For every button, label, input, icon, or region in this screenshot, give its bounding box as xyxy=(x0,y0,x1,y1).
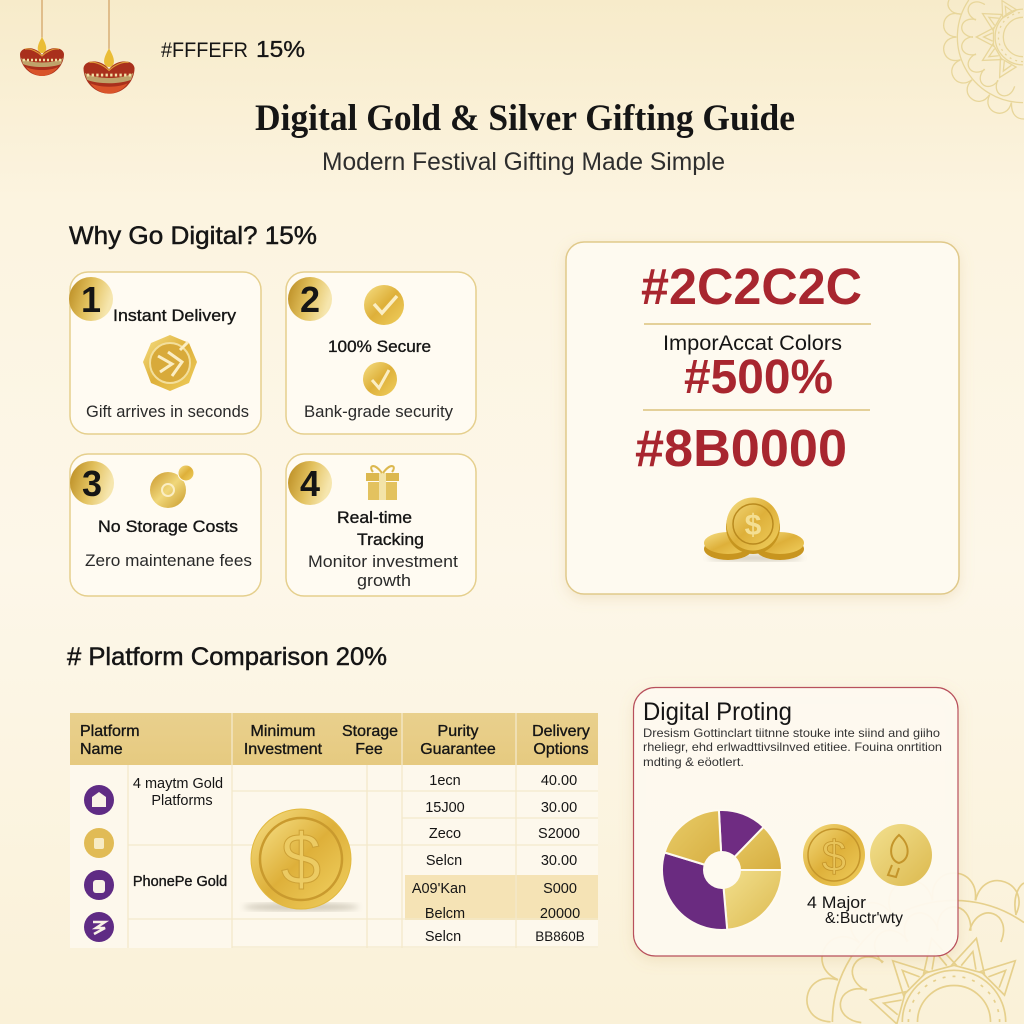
badge 2 xyxy=(288,277,332,321)
icon: coin stack xyxy=(704,498,804,561)
platform icons xyxy=(84,785,114,942)
card 1 text: Gift arrives in seconds xyxy=(86,402,249,421)
table header: Purity xyxy=(438,723,478,740)
card 2 heading: 100% Secure xyxy=(328,338,431,356)
top label: 15% xyxy=(256,36,305,62)
badge 1 xyxy=(69,277,113,321)
subtitle: Modern Festival Gifting Made Simple xyxy=(322,148,725,176)
panel paragraph: mdting & eöotlert. xyxy=(643,755,744,769)
icon: dollar coin: $ xyxy=(822,832,846,881)
panel paragraph: rheliegr, ehd erlwadttivsilnved etitiee. Fouina onrtition xyxy=(643,740,942,754)
mandala ornament: bottom right xyxy=(804,873,1024,1024)
icon: gold seal xyxy=(143,335,197,391)
chart caption xyxy=(807,893,903,927)
icon: gold disc xyxy=(150,465,194,508)
card 4 text: Monitor investment xyxy=(308,552,458,571)
table header: Platform xyxy=(80,723,140,740)
icon: drop coin xyxy=(870,824,932,886)
top label xyxy=(161,36,305,62)
panel heading: Digital Proting xyxy=(643,698,792,726)
badge 4 xyxy=(288,461,332,505)
panel: digital proting xyxy=(634,688,958,956)
table header: Minimum xyxy=(251,723,315,740)
table values xyxy=(412,773,585,945)
icon: dollar coin xyxy=(803,824,865,886)
value: 2C2C2C: #2C2C2C xyxy=(641,258,862,315)
panel: important colors xyxy=(566,242,959,594)
icon: large gold coin xyxy=(243,809,359,911)
platform names: Platforms xyxy=(151,793,213,809)
badge 3: 3 xyxy=(82,463,102,504)
table header: Fee xyxy=(355,741,383,758)
table values: 1ecn xyxy=(429,773,461,789)
card 2 text: Bank-grade security xyxy=(304,402,453,421)
platform names: 4 maytm Gold xyxy=(133,776,223,792)
mandala ornament: top right xyxy=(942,0,1024,119)
donut chart xyxy=(662,810,782,930)
platform names xyxy=(133,776,227,890)
table header: Investment xyxy=(244,741,323,758)
table values: 15J00 xyxy=(425,800,465,816)
icon: small gold check xyxy=(363,362,397,396)
badge 3 xyxy=(70,461,114,505)
panel paragraph xyxy=(643,726,942,769)
icon: hanging diya lamps xyxy=(20,0,135,94)
table values: A09'Kan xyxy=(412,881,466,897)
card 4: real-time tracking xyxy=(286,454,476,596)
table header: Guarantee xyxy=(420,741,496,758)
heading: platform comparison: # Platform Comparison 20% xyxy=(67,643,387,671)
table header: Storage xyxy=(342,723,398,740)
table values: Selcn xyxy=(426,853,462,869)
table header xyxy=(70,713,598,765)
icon: gold check xyxy=(364,285,404,325)
value: 8B0000: #8B0000 xyxy=(635,420,847,478)
table values: Selcn xyxy=(425,929,461,945)
card 3: no storage costs xyxy=(70,454,261,596)
table values: Belcm xyxy=(425,906,465,922)
card 3 text: Zero maintenane fees xyxy=(85,551,252,570)
card 4 heading: Tracking xyxy=(357,531,424,549)
card 3 heading: No Storage Costs xyxy=(98,518,238,536)
table header: Delivery xyxy=(532,723,590,740)
icon: gift box xyxy=(366,466,399,500)
value: 500 percent: #500% xyxy=(684,351,833,404)
card 2: secure xyxy=(286,272,476,434)
table values: 30.00 xyxy=(541,853,577,869)
table values: 40.00 xyxy=(541,773,577,789)
table values: BB860B xyxy=(535,929,585,944)
card 1 heading: Instant Delivery xyxy=(113,307,237,325)
table values: S2000 xyxy=(538,826,580,842)
comparison table xyxy=(70,713,598,948)
badge 2: 2 xyxy=(300,279,320,320)
card 4 heading xyxy=(337,509,424,549)
table values: 20000 xyxy=(540,906,580,922)
table values: Zeco xyxy=(429,826,461,842)
table header: Name xyxy=(80,741,123,758)
badge 1: 1 xyxy=(81,279,101,320)
card 4 text xyxy=(308,552,458,590)
heading: why go digital: Why Go Digital? 15% xyxy=(69,222,317,250)
icon: coin stack: $ xyxy=(745,509,762,542)
badge 4: 4 xyxy=(300,463,320,504)
label: colors: ImporAccat Colors xyxy=(663,332,842,355)
platform names: PhonePe Gold xyxy=(133,874,227,890)
chart caption: &:Buctr'wty xyxy=(825,910,903,927)
panel paragraph: Dresism Gottinclart tiitnne stouke inte siind and giiho xyxy=(643,726,940,740)
card 1: instant delivery xyxy=(69,272,261,434)
top label: #FFFEFR xyxy=(161,39,248,62)
chart caption: 4 Major xyxy=(807,893,866,912)
card 4 text: growth xyxy=(357,571,411,590)
table header: Options xyxy=(533,741,589,758)
icon: large gold coin: $ xyxy=(281,820,321,900)
card 4 heading: Real-time xyxy=(337,509,412,527)
table values: 30.00 xyxy=(541,800,577,816)
table values: S000 xyxy=(543,881,577,897)
title: Digital Gold & Silver Gifting Guide xyxy=(255,98,795,139)
